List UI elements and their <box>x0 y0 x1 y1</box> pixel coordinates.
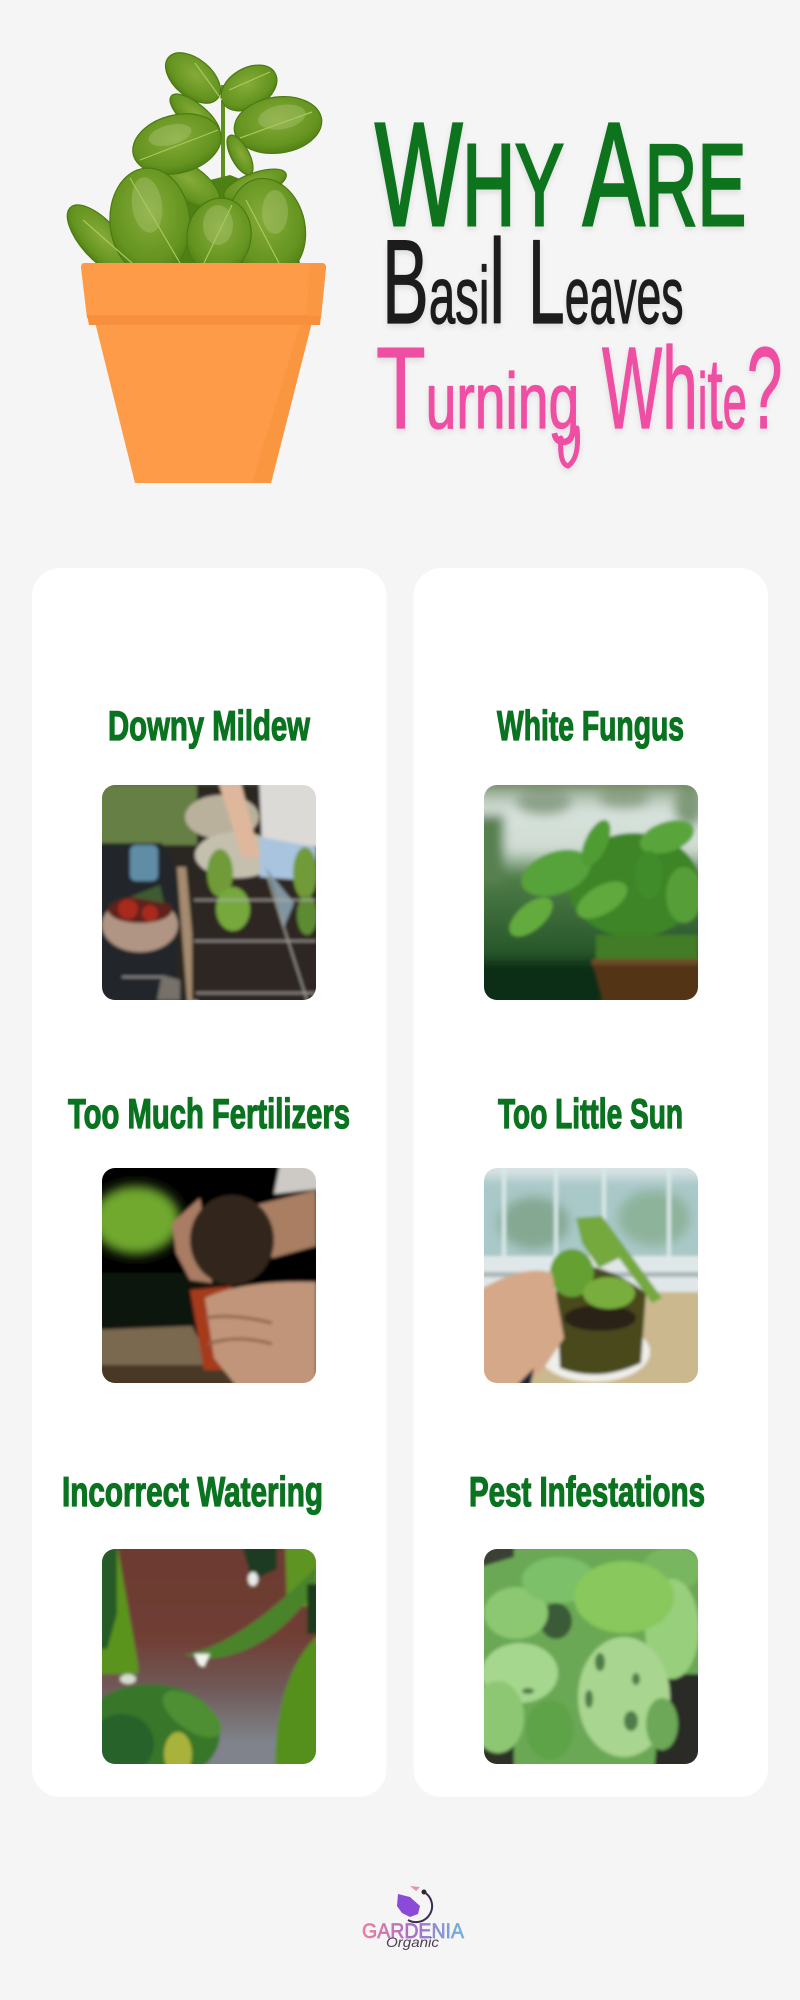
title line: Turning White?: Turning <box>376 324 579 453</box>
panel: right column <box>414 568 768 1797</box>
title <box>375 93 782 466</box>
photo: potted basil outdoors <box>484 785 698 1000</box>
basil stem <box>221 85 225 263</box>
photo: water droplets on leaves <box>102 1549 316 1764</box>
title line: Basil Leaves: Basil <box>382 214 505 349</box>
heading: Incorrect Watering: Incorrect Watering <box>62 1468 323 1515</box>
heading: White Fungus: White Fungus <box>497 702 684 749</box>
flower pot <box>81 263 326 483</box>
logo: Gardenia Organic <box>362 1886 464 1950</box>
illustration: potted basil plant <box>56 43 326 483</box>
photo: gardener tending raised bed <box>102 785 316 1000</box>
heading: Too Much Fertilizers: Too Much Fertilizers <box>68 1090 350 1137</box>
heading: Too Little Sun: Too Little Sun <box>498 1090 683 1137</box>
title line: Why Are: WHY ARE <box>375 93 746 257</box>
logo tagline: Organic <box>386 1934 439 1950</box>
heading: Pest Infestations: Pest Infestations <box>469 1468 705 1515</box>
title line: Turning White?: White? <box>602 323 782 453</box>
photo: plant held near window <box>484 1168 698 1383</box>
logo icon <box>397 1886 432 1922</box>
panel: left column <box>32 568 386 1797</box>
title line: Basil Leaves <box>382 214 684 349</box>
leaf highlights and veins <box>83 63 312 265</box>
title line: Turning White? <box>376 323 782 466</box>
photo: pest-damaged basil leaves <box>484 1549 698 1764</box>
basil leaves <box>56 43 325 285</box>
title line: Basil Leaves: Leaves <box>528 214 684 349</box>
logo wordmark: GARDENIA <box>362 1920 464 1943</box>
heading: Downy Mildew: Downy Mildew <box>108 702 310 749</box>
photo: hands repotting a root ball <box>102 1168 316 1383</box>
